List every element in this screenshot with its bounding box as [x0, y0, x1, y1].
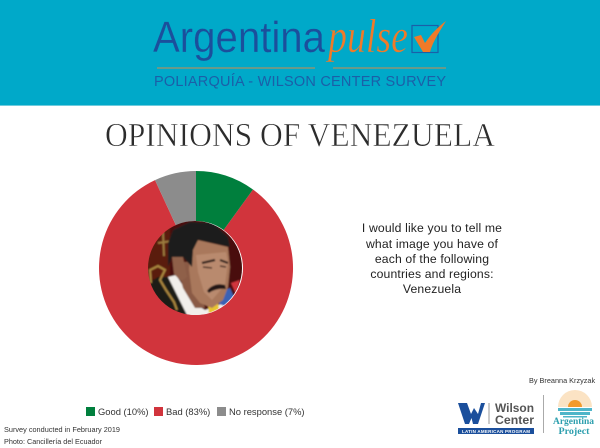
source notes: Survey conducted in February 2019: [4, 425, 120, 434]
question text: [362, 221, 502, 296]
question text: what image you have of: [365, 237, 498, 251]
logo: Argentina Project: Project: [558, 427, 590, 437]
title: OPINIONS OF VENEZUELA: [105, 117, 495, 154]
coat and chain: [150, 276, 186, 314]
neck: [176, 262, 205, 308]
hair: [168, 222, 230, 267]
source notes: Photo: Cancillería del Ecuador: [4, 437, 102, 446]
logo: Argentina Project: [553, 390, 594, 437]
logo: Argentina Pulse: pulse: [326, 10, 408, 63]
question text: Venezuela: [403, 282, 461, 296]
donut segment: Bad 83%: [99, 180, 293, 365]
logo: Wilson Center: LATIN AMERICAN PROGRAM: [462, 429, 530, 434]
byline: By Breanna Krzyzak: [529, 376, 595, 385]
question text: each of the following: [375, 252, 489, 266]
legend item: No response: No response (7%): [229, 406, 305, 417]
logo: Wilson Center: Wilson: [495, 401, 534, 415]
question text: countries and regions:: [370, 267, 494, 281]
logo: Argentina Project: Argentina: [553, 417, 594, 427]
source notes: [4, 425, 120, 446]
header banner: [0, 0, 600, 106]
donut chart: [99, 171, 293, 365]
question text: I would like you to tell me: [362, 221, 502, 235]
logo: Wilson Center: [458, 401, 534, 434]
legend item: Good: Good (10%): [98, 406, 149, 417]
logo: Wilson Center: Center: [495, 413, 534, 427]
logo: Argentina Pulse: Argentina: [153, 13, 325, 62]
donut segment: Good 10%: [196, 171, 253, 230]
collar and shirt: [166, 274, 224, 315]
legend item: Bad: Bad (83%): [166, 406, 210, 417]
legend: [86, 406, 305, 417]
photo: portrait in donut centre: [146, 219, 244, 317]
logo: Argentina Pulse: [153, 10, 446, 90]
face: [189, 240, 230, 308]
logo: Argentina Pulse: POLIARQUÍA - WILSON CENTER SURVEY: [154, 73, 446, 90]
divider: [543, 395, 544, 433]
donut segment: No response 7%: [155, 171, 196, 226]
